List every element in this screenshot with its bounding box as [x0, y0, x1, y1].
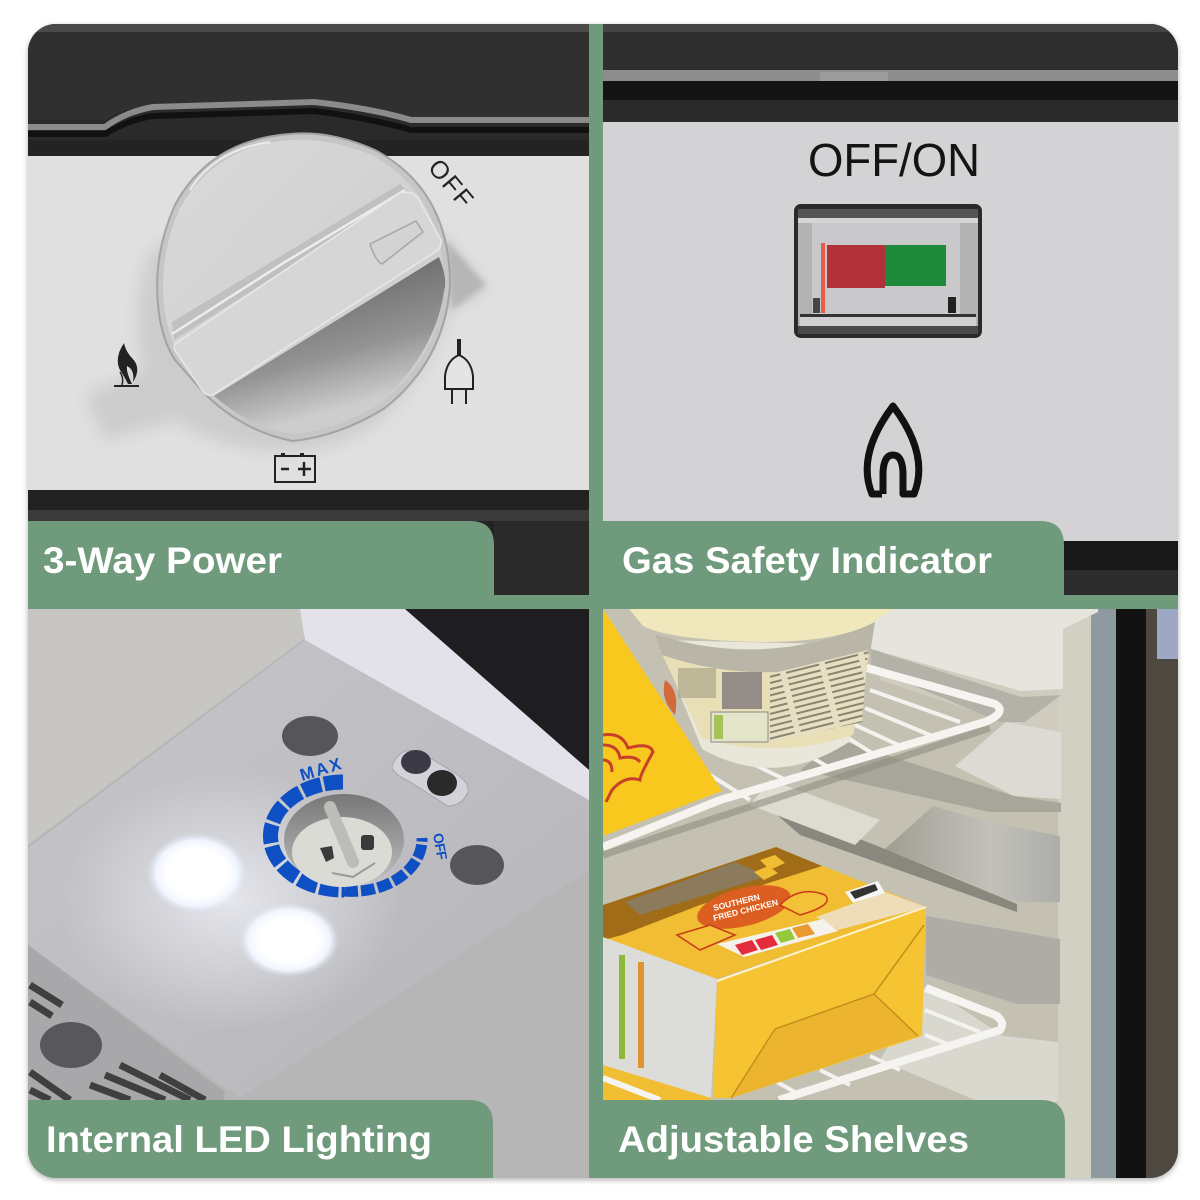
dimmer dial	[270, 754, 451, 891]
indicator window	[794, 204, 982, 338]
dimmer dial: MAX	[298, 754, 344, 785]
LED lights	[150, 835, 244, 910]
panel: gas safety indicator photo	[603, 24, 1178, 595]
top shelf front wire	[603, 668, 1000, 855]
label: Internal LED Lighting: Internal LED Lighting	[46, 1119, 432, 1160]
yogurt pot	[629, 609, 893, 768]
text: OFF/ON: OFF/ON	[808, 134, 980, 186]
panel: 3-way power knob photo	[28, 24, 589, 595]
dimmer dial: OFF	[430, 832, 451, 862]
sensors	[392, 750, 468, 806]
light glow	[96, 797, 368, 1006]
icon: flame	[114, 343, 139, 386]
light fitting plate	[28, 640, 589, 1098]
bottom shelf front wire	[779, 988, 1002, 1100]
storage blocks	[750, 609, 1098, 1102]
yellow packet	[603, 609, 722, 836]
icon: battery	[275, 453, 315, 482]
panel: internal LED lighting photo	[28, 609, 589, 1178]
knob shadow	[88, 237, 488, 452]
icon: gas flame	[867, 406, 919, 494]
icon: rotary knob	[157, 133, 450, 441]
butter carton: FRIED CHICKEN	[712, 897, 779, 923]
label: Adjustable Shelves: Adjustable Shelves	[618, 1119, 969, 1160]
shelf back wires	[710, 665, 1000, 1095]
butter carton: SOUTHERN	[712, 892, 761, 913]
icon: plug	[445, 339, 473, 404]
label: 3-Way Power: 3-Way Power	[43, 540, 282, 581]
panel: adjustable shelves photo	[603, 609, 1178, 1178]
label: 3-Way Power	[28, 521, 494, 595]
text: OFF mark: OFF	[422, 154, 479, 213]
label: Internal LED Lighting	[28, 1100, 493, 1178]
label: Gas Safety Indicator	[603, 521, 1064, 595]
vent slots	[30, 985, 205, 1100]
label: Gas Safety Indicator: Gas Safety Indicator	[622, 540, 992, 581]
butter carton	[603, 847, 926, 1100]
screws	[282, 716, 338, 756]
label: Adjustable Shelves	[589, 1100, 1065, 1178]
